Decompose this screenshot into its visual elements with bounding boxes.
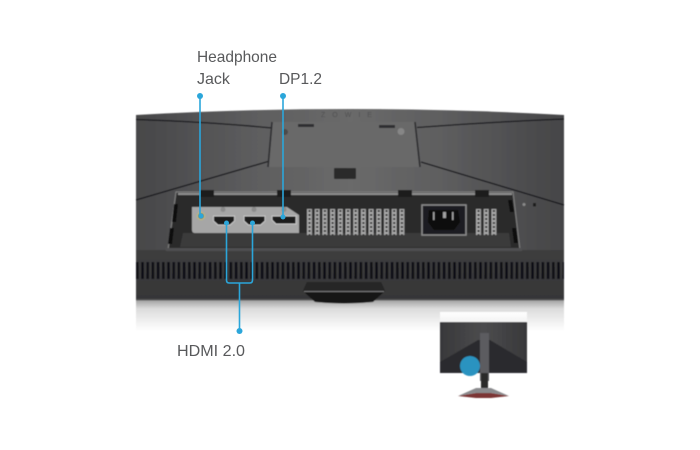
- stand mounting plate: [268, 122, 420, 167]
- right ventilation holes: [476, 209, 497, 235]
- HDMI port 1: [214, 216, 234, 225]
- monitor back shell: [136, 109, 564, 262]
- HDMI port 2: [244, 216, 265, 225]
- thumbnail backdrop: [440, 312, 527, 322]
- callout lines: [200, 96, 283, 331]
- bay side clips: [168, 200, 518, 244]
- thumbnail: monitor with stand: [440, 312, 527, 398]
- thumbnail base red accent: [458, 393, 509, 398]
- HDMI bracket leader: [226, 223, 252, 331]
- lower bezel: [136, 250, 564, 300]
- port screws: [220, 207, 286, 212]
- label: HDMI 2.0: HDMI 2.0: [177, 343, 245, 360]
- thumbnail stand base column: [481, 373, 488, 388]
- DisplayPort leader: [282, 96, 284, 217]
- headphone jack leader: [199, 96, 201, 216]
- power socket: [422, 205, 466, 235]
- callout dots: [197, 93, 286, 334]
- thumbnail highlight circle: [460, 356, 480, 376]
- bay lower lip: [166, 248, 522, 251]
- mounting screws: [282, 124, 404, 135]
- thumbnail monitor back: [440, 322, 527, 373]
- monitor rear view: [136, 109, 564, 331]
- indicator dots: [522, 203, 536, 206]
- label: Headphone Jack: Headphone: [197, 49, 277, 66]
- vent grille: [136, 262, 564, 279]
- bay floor: [180, 233, 511, 247]
- foot upper face: [303, 282, 385, 291]
- bottom edge highlight: [136, 299, 564, 300]
- stand foot: [303, 282, 385, 304]
- DisplayPort: [272, 216, 296, 224]
- label: Headphone Jack: Jack: [197, 71, 231, 88]
- port bay: [168, 192, 520, 250]
- silver port panel: [192, 207, 299, 233]
- thumbnail lower shell shading: [440, 340, 527, 373]
- label: DP1.2: DP1.2: [279, 71, 322, 88]
- logo embossing: ZOWIE: [321, 112, 379, 119]
- plate shadow edges: [268, 122, 420, 167]
- bay upper lip: [178, 190, 512, 197]
- headphone jack: [196, 212, 206, 220]
- foot highlight: [304, 290, 384, 292]
- stand clip: [334, 168, 356, 179]
- ventilation holes: [307, 209, 405, 235]
- shell crease lines: [136, 119, 564, 205]
- thumbnail stand: [480, 333, 489, 381]
- thumbnail base: [458, 388, 509, 396]
- reflection under monitor: [136, 299, 564, 331]
